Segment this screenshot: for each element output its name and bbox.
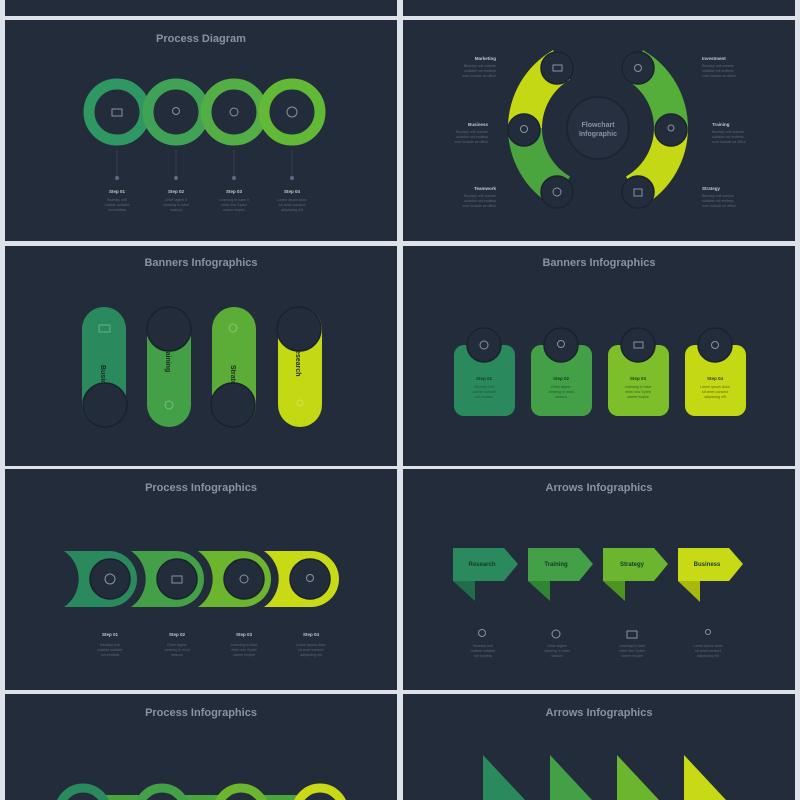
side labels: suitable not endless [702, 199, 734, 203]
card texts [472, 376, 731, 399]
card texts: adipiscing elit [704, 395, 726, 399]
flag texts: Learning to have [619, 644, 645, 648]
pill labels: Research [294, 345, 301, 377]
flag labels: Strategy [620, 562, 645, 568]
step texts: Step 04 [303, 632, 319, 637]
pill dark circles [83, 307, 321, 427]
step texts: Lorem ipsum dolor [296, 643, 327, 647]
flag texts: Bluesky unit [473, 644, 493, 648]
ring icons [112, 107, 297, 117]
node circles [508, 52, 687, 208]
side labels: sure include as office [702, 74, 736, 78]
side labels: sure include as office [712, 140, 746, 144]
panel: bottom process [5, 694, 397, 800]
card texts: Drive tagine [551, 385, 571, 389]
side labels: Marketing [475, 56, 496, 61]
card texts: Step 03 [630, 376, 646, 381]
panel: arrows flags [403, 469, 795, 690]
side labels: sure include as office [454, 140, 488, 144]
step texts: Step 01 [102, 632, 118, 637]
side labels: Bluesky unit outside [702, 194, 734, 198]
side labels: suitable not endless [464, 69, 496, 73]
side labels: suitable not endless [712, 135, 744, 139]
step texts: Bluesky unit [100, 643, 120, 647]
card texts: career inspire [627, 395, 649, 399]
step texts: Lorem ipsum dolor [277, 198, 308, 202]
side labels: Teamwork [474, 186, 496, 191]
card texts: Step 01 [476, 376, 492, 381]
card texts: season [555, 395, 567, 399]
step texts: Bluesky unit [107, 198, 127, 202]
card texts: enter into Sprint [625, 390, 651, 394]
step texts: enter into Sprint [221, 203, 247, 207]
step texts: Step 02 [168, 189, 184, 194]
panel: banners cards [403, 246, 795, 466]
left arc: green lower [508, 128, 570, 206]
card circles [467, 328, 732, 362]
flag labels: Training [544, 562, 568, 568]
panel: process diagram [5, 20, 397, 241]
pill labels: Business [99, 365, 106, 396]
side labels [454, 56, 746, 208]
card texts: sit amet consect [702, 390, 728, 394]
card texts: outside suitable [472, 390, 496, 394]
chevron inner circles [90, 559, 330, 599]
card texts: Bluesky unit [474, 385, 494, 389]
side labels: Training [712, 122, 730, 127]
flag texts: Lorem ipsum dolor [693, 644, 724, 648]
card texts: clearing in mind [548, 390, 574, 394]
node icons [520, 64, 674, 196]
side labels: Business [468, 122, 488, 127]
chevron shapes [64, 551, 339, 607]
step texts: Step 01 [109, 189, 125, 194]
right arc: green upper [626, 50, 688, 128]
step connectors [117, 150, 292, 177]
title: Process Infographics [145, 482, 257, 494]
flag labels: Business [694, 562, 721, 568]
arrow flags [453, 548, 743, 602]
band [75, 795, 325, 800]
pills [82, 307, 322, 427]
card texts: not endless [475, 395, 493, 399]
panel: bottom arrows [403, 694, 795, 800]
panel: banners pills [5, 246, 397, 466]
side labels: sure include as office [702, 204, 736, 208]
step texts: adipiscing elit [281, 208, 303, 212]
step texts: outside suitable [105, 203, 129, 207]
rings [89, 84, 320, 140]
step texts: career inspire [223, 208, 245, 212]
title: Arrows Infographics [546, 707, 652, 719]
side labels: Bluesky unit outside [712, 130, 744, 134]
side labels: sure include as office [462, 204, 496, 208]
step texts: Step 02 [169, 632, 185, 637]
pill labels: Training [164, 345, 171, 372]
panel: flowchart [403, 20, 795, 241]
side labels: Investment [702, 56, 726, 61]
flag texts: sit amet consect [695, 649, 721, 653]
step texts: career inspire [233, 653, 255, 657]
side labels: Bluesky unit outside [464, 64, 496, 68]
card texts: Learning to have [625, 385, 651, 389]
flag texts: enter into Sprint [619, 649, 645, 653]
center circle [567, 97, 629, 159]
step texts: not endless [108, 208, 126, 212]
side labels: suitable not endless [464, 199, 496, 203]
center circle: Flowchart [581, 122, 615, 129]
flag texts [471, 644, 724, 658]
pill labels: Strategy [229, 365, 236, 393]
chevron icons [105, 574, 314, 584]
step texts: not endless [101, 653, 119, 657]
step texts: enter into Sprint [231, 648, 257, 652]
step texts: clearing in mind [163, 203, 189, 207]
side labels: sure include as office [462, 74, 496, 78]
title: Arrows Infographics [546, 482, 652, 494]
pill labels [99, 345, 301, 396]
step texts: Drive tagine [167, 643, 187, 647]
rings [59, 788, 344, 800]
flag texts: Drive tagine [547, 644, 567, 648]
flag texts: clearing in mind [544, 649, 570, 653]
card texts: Lorem ipsum dolor [700, 385, 731, 389]
step texts: outside suitable [98, 648, 122, 652]
flag texts: career inspire [621, 654, 643, 658]
card texts: Step 04 [707, 376, 723, 381]
flag labels [468, 562, 721, 568]
step texts: Drive tagine it [165, 198, 187, 202]
flag texts: outside suitable [471, 649, 495, 653]
left arc: yellow upper [508, 50, 570, 128]
step texts: clearing in mind [164, 648, 190, 652]
step texts [105, 189, 308, 212]
step texts: Learning to have it [219, 198, 249, 202]
flag icons [478, 630, 710, 638]
step texts: Step 03 [236, 632, 252, 637]
step texts: season [171, 653, 183, 657]
side labels: suitable not endless [456, 135, 488, 139]
right arc: yellow lower [626, 128, 688, 206]
flag texts: adipiscing elit [697, 654, 719, 658]
flag texts: season [551, 654, 563, 658]
step texts: Step 03 [226, 189, 242, 194]
title: Process Infographics [145, 707, 257, 719]
step texts: Step 04 [284, 189, 300, 194]
step texts: sit amet consect [298, 648, 324, 652]
step texts: sit amet consect [279, 203, 305, 207]
step texts: adipiscing elit [300, 653, 322, 657]
card icons [480, 340, 718, 349]
side labels: Strategy [702, 186, 721, 191]
side labels: Bluesky unit outside [702, 64, 734, 68]
card texts: Step 02 [553, 376, 569, 381]
side labels: Bluesky unit outside [456, 130, 488, 134]
side labels: Bluesky unit outside [464, 194, 496, 198]
center circle: Infographic [579, 131, 617, 138]
flag texts: not endless [474, 654, 492, 658]
cards [454, 345, 746, 416]
flag labels: Research [468, 562, 496, 568]
pill icons [99, 324, 303, 409]
step texts: season [170, 208, 182, 212]
title: Banners Infographics [542, 257, 656, 269]
title: Banners Infographics [144, 257, 258, 269]
step texts: Learning to have [231, 643, 257, 647]
title: process diagram: Process Diagram [156, 33, 246, 45]
step texts [98, 632, 327, 657]
panel: top partial [5, 0, 795, 16]
panel: process chevrons [5, 469, 397, 690]
triangles [483, 755, 726, 800]
side labels: suitable not endless [702, 69, 734, 73]
